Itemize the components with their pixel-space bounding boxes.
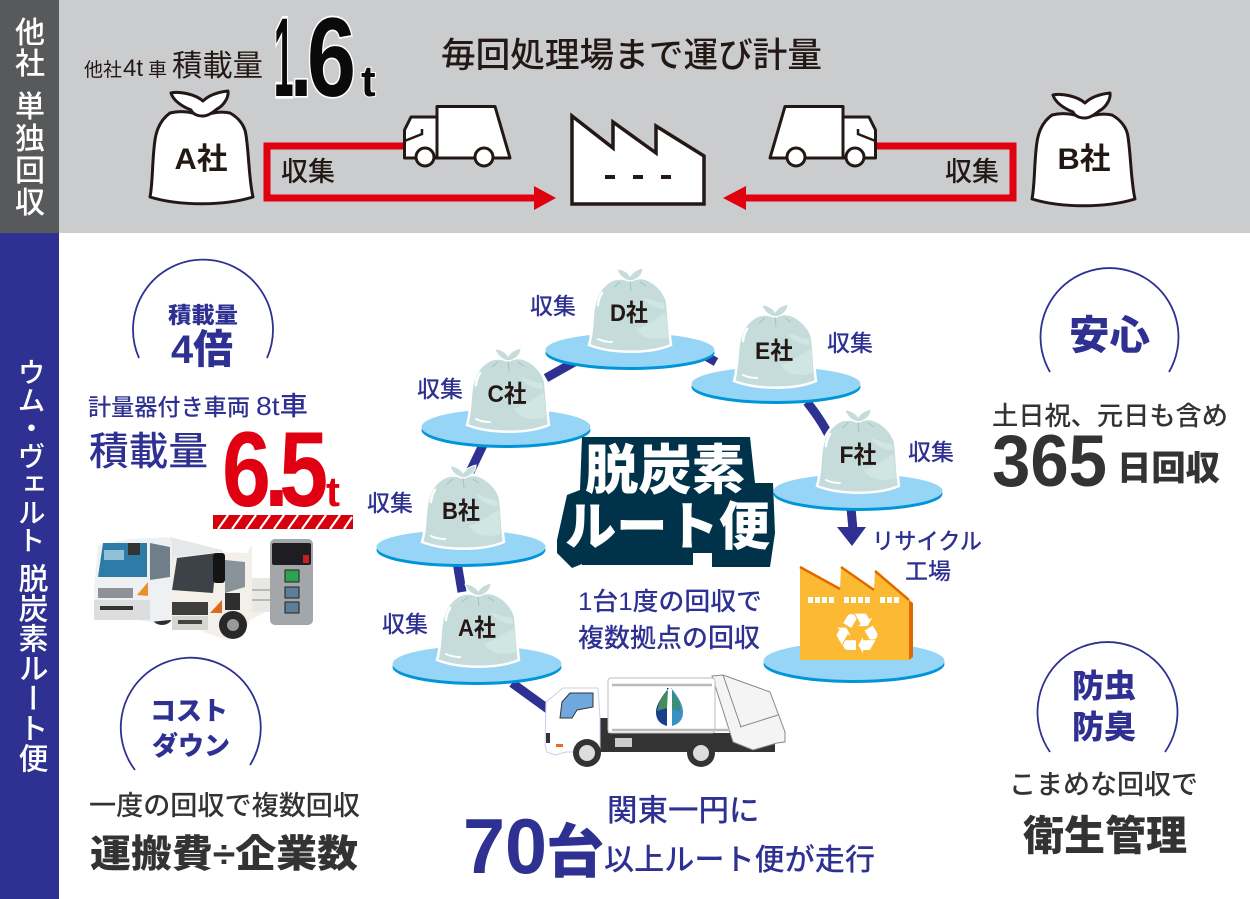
feature: コストダウン: コスト — [150, 696, 228, 726]
icon: leaf logo — [656, 688, 683, 726]
side label: 他社 単独回収: 社 — [15, 48, 45, 81]
feature: 防虫防臭: 防虫 — [1072, 668, 1136, 704]
feature: 安心 — [1041, 268, 1179, 372]
photo: trucks — [94, 537, 270, 640]
計量器付き車両 8t車: 8t車 — [256, 391, 308, 421]
other company load label: 積載量 — [172, 50, 263, 83]
bag B — [422, 465, 504, 549]
bag D — [589, 268, 671, 352]
bag B: B社 — [442, 498, 480, 525]
feature: 安心: 安心 — [1069, 314, 1150, 358]
caption: 1台1度の回収で 複数拠点の回収: 1台1度の回収で — [578, 588, 762, 616]
365日回収: 日回収 — [1117, 450, 1220, 488]
route connector lines — [457, 346, 853, 712]
feature: 防虫防臭: 防臭 — [1072, 709, 1136, 745]
feature: コストダウン: ダウン — [152, 731, 230, 761]
side label: 他社 単独回収: 収 — [15, 187, 45, 220]
digital number 1.6t: . — [290, 0, 312, 120]
bag A: A社 — [458, 615, 496, 642]
side label: 他社 単独回収: 回 — [15, 155, 45, 188]
platform: F — [774, 474, 942, 511]
積載量: 積載量 — [89, 431, 208, 474]
計量器付き車両 8t車 — [88, 391, 308, 421]
platform: D — [546, 333, 714, 370]
feature: 積載量 4倍: 4倍 — [171, 328, 233, 372]
bag C: C社 — [488, 381, 526, 408]
platform: E — [692, 367, 860, 404]
収集 right: 収集 — [945, 157, 999, 187]
center title: 脱炭素ルート便 — [557, 437, 775, 568]
statistic: 70台 — [463, 802, 604, 890]
bag E — [734, 304, 816, 388]
platform: C — [422, 409, 590, 448]
top panel background — [0, 0, 1250, 233]
土日祝、元日も含め: 土日祝、元日も含め — [992, 401, 1228, 431]
bag A — [150, 91, 253, 204]
収集 labels: 収集 — [382, 611, 428, 637]
feature: 積載量 4倍 — [133, 260, 273, 372]
side label: 他社 単独回収: 他 — [15, 17, 45, 50]
digital number 6.5t: 5 — [279, 409, 328, 529]
other company load label — [84, 50, 263, 83]
feature: 積載量 4倍: 積載量 — [168, 303, 238, 328]
side label: 他社 単独回収 — [0, 0, 59, 233]
運搬費÷企業数: 運搬費÷企業数 — [90, 834, 358, 876]
digital number 6.5t — [222, 409, 340, 529]
一度の回収で複数回収: 一度の回収で複数回収 — [89, 791, 360, 821]
label: リサイクル工場: リサイクル — [872, 528, 982, 554]
label: リサイクル工場: 工場 — [905, 558, 951, 584]
bag F — [817, 409, 899, 493]
digital number 6.5t: t — [326, 468, 340, 515]
計量器付き車両 8t車: 計量器付き車両 — [88, 394, 250, 420]
platform: B — [376, 530, 546, 567]
text: 以上ルート便が走行: 以上ルート便が走行 — [604, 844, 875, 877]
side label: ウム・ヴェルト 脱炭素ルート便: 脱炭素ルート便 — [14, 563, 48, 773]
bag B: B社 — [1058, 143, 1110, 176]
truck right — [770, 106, 876, 166]
収集 labels: 収集 — [367, 490, 413, 516]
recycling factory — [800, 567, 913, 667]
digital number 1.6t: t — [361, 57, 376, 106]
text: 関東一円に: 関東一円に — [607, 794, 760, 828]
bag E: E社 — [755, 338, 793, 365]
caption: 1台1度の回収で 複数拠点の回収: 複数拠点の回収 — [578, 623, 760, 653]
digital number 6.5t: . — [264, 409, 289, 529]
arrow to recycling factory — [837, 527, 866, 546]
other company load label: 他社 — [84, 59, 122, 81]
収集 labels: 収集 — [417, 376, 463, 402]
other company load label: 車 — [148, 59, 167, 81]
platform: factory — [764, 642, 944, 683]
こまめな回収で: こまめな回収で — [1009, 770, 1198, 800]
digital number 6.5t: 6 — [222, 409, 271, 529]
bag A: A社 — [174, 143, 228, 176]
収集 labels: 収集 — [530, 293, 576, 319]
other company load label: 4t — [123, 55, 143, 82]
digital number 1.6t — [274, 0, 376, 120]
365日回収: 365 — [992, 421, 1107, 502]
side label: ウム・ヴェルト 脱炭素ルート便: ウム・ヴェルト — [14, 358, 46, 554]
feature: コストダウン — [121, 658, 261, 770]
収集 left: 収集 — [281, 157, 335, 187]
衛生管理: 衛生管理 — [1023, 813, 1187, 859]
収集 labels: 収集 — [827, 330, 873, 356]
factory — [572, 116, 704, 204]
striped bar — [213, 515, 353, 529]
heading: 毎回処理場まで運び計量: 毎回処理場まで運び計量 — [441, 37, 822, 75]
truck left — [404, 106, 510, 166]
statistic: 70台: 70 — [463, 802, 547, 890]
収集 labels — [367, 293, 954, 637]
garbage truck — [545, 675, 785, 767]
recycling factory: ♻ — [832, 602, 882, 667]
statistic: 70台: 台 — [546, 820, 604, 885]
center title: 脱炭素ルート便: ルート便 — [565, 499, 770, 557]
photo: weighing device — [270, 539, 313, 625]
side label: 他社 単独回収: 独 — [15, 123, 45, 156]
center title: 脱炭素ルート便: 脱炭素 — [585, 441, 745, 501]
bag A — [437, 583, 519, 667]
platform: A — [392, 646, 562, 685]
red route left with arrow — [267, 146, 556, 210]
side label: 他社 単独回収: 単 — [15, 91, 45, 124]
caption: 1台1度の回収で 複数拠点の回収 — [578, 588, 762, 653]
bag C — [467, 348, 549, 432]
side label: ウム・ヴェルト 脱炭素ルート便 — [0, 233, 59, 899]
bag D: D社 — [610, 300, 648, 327]
red route right with arrow — [723, 146, 1013, 210]
365日回収 — [992, 421, 1220, 502]
bag B — [1032, 93, 1135, 206]
label: リサイクル工場 — [872, 528, 982, 584]
feature: 防虫防臭 — [1038, 642, 1178, 752]
bag F: F社 — [840, 442, 876, 469]
収集 labels: 収集 — [908, 439, 954, 465]
